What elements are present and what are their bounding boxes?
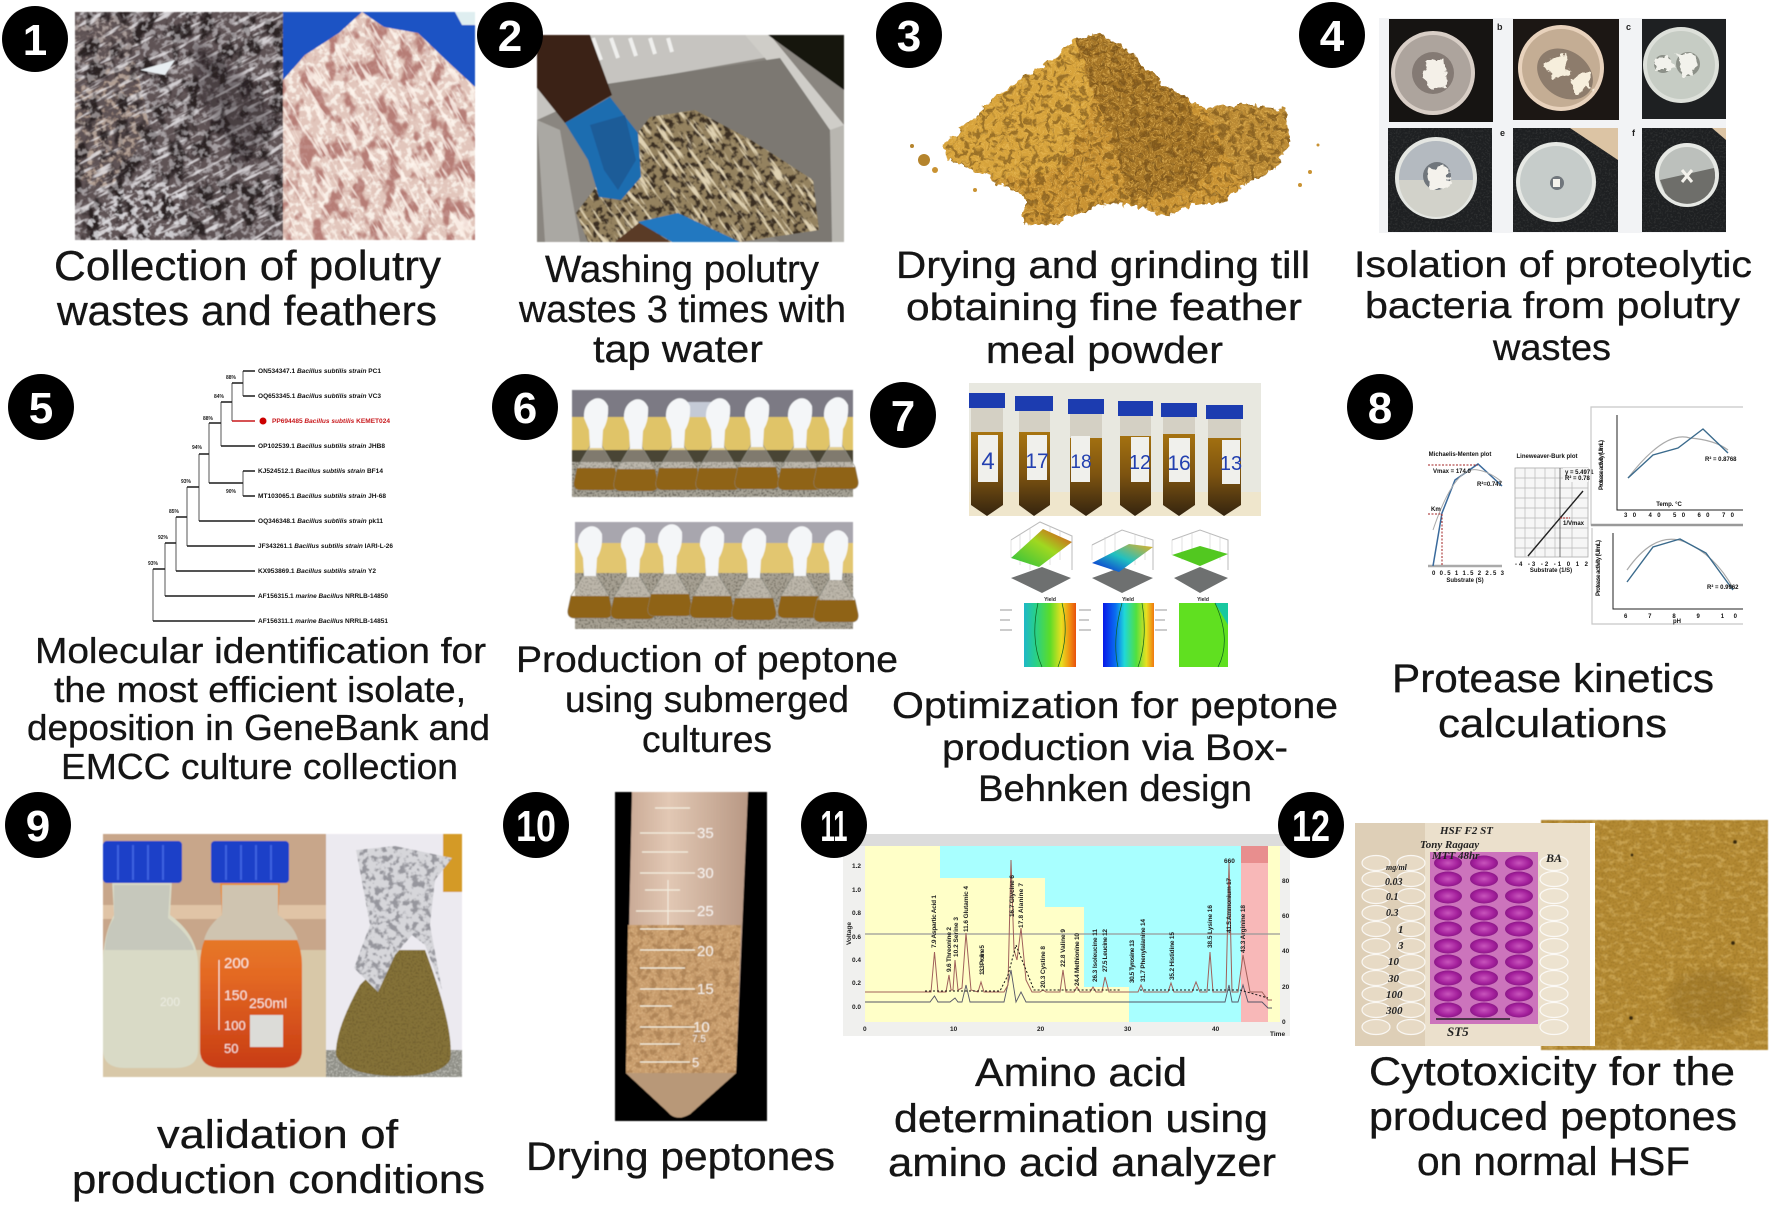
chromatogram: 0.2 [852,980,861,987]
chromatogram: Voltage [846,922,853,945]
caption 8: calculations [1438,702,1667,746]
phylogenetic tree: KJ524512.1 Bacillus subtilis strain BF14 [258,468,384,475]
chromatogram: 22.8 Valine 9 [1060,929,1067,967]
photo: 96-well MTT plate: BA [1545,851,1562,865]
chart: Lineweaver-Burk plot: R² = 0.78 [1565,475,1591,482]
badge 1 [2,6,68,72]
caption 9 [72,1113,485,1202]
badge 6: 6 [513,384,537,433]
caption 5 [27,630,490,787]
phylogenetic tree: 84% [214,394,225,400]
photo: conical tube with dried peptone: 10 [693,1019,710,1036]
phylogenetic tree: 85% [169,509,180,515]
photo: 96-well MTT plate [1355,823,1595,1046]
caption 3 [896,245,1310,372]
chart: Lineweaver-Burk plot [1515,454,1594,574]
chart: temperature activity: 30 40 50 60 70 [1624,513,1735,519]
caption 5: Molecular identification for [35,630,486,671]
panel: step 4 isolation [1299,2,1752,368]
photo: 96-well MTT plate: 0.03 [1385,877,1402,888]
chart: pH activity: 6 7 8 9 10 [1624,614,1738,620]
photo: agar plates with clear zones: c [1626,22,1631,32]
badge 11: 11 [820,802,848,851]
photo: conical tube with dried peptone: 7.5 [692,1034,706,1045]
badge 7 [870,382,936,448]
chromatogram: 40 [1212,1026,1220,1033]
photo: 96-well MTT plate: 3 [1397,940,1404,952]
badge 12 [1278,792,1344,858]
caption 1 [54,242,441,334]
chromatogram: 9.6 Threonine 2 [946,927,953,972]
chart: pH activity: Protease activity (U/mL) [1596,540,1602,596]
caption 4 [1354,244,1752,368]
photo: two bottles and foil-capped flask: 100 [224,1018,246,1033]
photo: six tubes: 17 [1025,450,1049,473]
photo: two bottles and foil-capped flask: 200 [224,955,249,972]
chromatogram [843,834,1290,1038]
photo: 96-well MTT plate: 30 [1387,973,1400,985]
photo: conical tube with dried peptone: 15 [697,981,714,998]
photo: two bottles and foil-capped flask: 50 [224,1041,238,1056]
chart: Lineweaver-Burk plot: Substrate (1/S) [1530,568,1572,574]
chart: Lineweaver-Burk plot: -4 -3 -2 -1 0 1 2 [1515,562,1589,568]
caption 12: on normal HSF [1417,1140,1690,1184]
chromatogram: 30 [1124,1026,1132,1033]
badge 6 [492,374,558,440]
badge 2 [477,2,543,68]
caption 6: using submerged [565,679,849,720]
badge 5: 5 [29,384,53,433]
panel: step 11 amino acid analysis [801,792,1290,1185]
photo: agar plates with clear zones: f [1632,128,1636,138]
photo: 96-well MTT plate: 0.1 [1386,892,1398,903]
caption 7: production via Box- [942,727,1288,768]
badge 4: 4 [1320,12,1345,61]
chromatogram: 11.6 Glutamic 4 [963,886,970,932]
phylogenetic tree: 90% [226,489,237,495]
badge 7: 7 [891,392,915,441]
chart: temperature activity: Temp. °C [1656,502,1682,508]
chromatogram: 0.4 [852,957,861,964]
chromatogram: 80 [1282,878,1290,885]
phylogenetic tree: 94% [192,445,203,451]
chromatogram: 43.3 Arginine 18 [1240,905,1247,953]
caption 2: Washing polutry [545,249,819,291]
photo: washing in a sink [536,34,845,243]
chromatogram: 10.2 Serine 3 [953,917,960,957]
caption 2: wastes 3 times with [518,289,846,331]
badge 8: 8 [1368,384,1392,433]
caption 3: obtaining fine feather [906,287,1302,329]
photo: agar plates with clear zones [1379,18,1726,233]
phylogenetic tree: JF343261.1 Bacillus subtilis strain IARI-L-26 [258,543,394,550]
caption 5: EMCC culture collection [61,746,458,787]
photo: flasks row two [568,522,858,629]
caption 4: wastes [1492,327,1611,368]
chart: pH activity: pH [1673,619,1681,625]
caption 11: amino acid analyzer [888,1141,1276,1185]
contour plots [1000,597,1228,667]
panel: step 1 collection [2,6,476,326]
caption 12: Cytotoxicity for the [1369,1050,1735,1094]
photo: 96-well MTT plate: HSF F2 ST [1439,825,1494,837]
caption 10: Drying peptones [526,1135,835,1179]
chromatogram: 20.3 Cystine 8 [1040,946,1047,988]
photo: agar plates with clear zones: e [1500,128,1505,138]
badge 2: 2 [498,12,522,61]
badge 5 [8,374,74,440]
phylogenetic tree: 88% [226,375,237,381]
chromatogram: 0 [863,1026,867,1033]
photo: 96-well MTT plate: 0.3 [1386,908,1398,919]
chart: temperature activity [1591,407,1743,525]
photo: flasks row one [572,390,858,497]
caption 11: Amino acid [975,1051,1187,1095]
phylogenetic tree [148,368,394,625]
photo: six tubes: 13 [1220,453,1242,475]
caption 5: deposition in GeneBank and [27,707,490,748]
panel: step 7 Box-Behnken optimization [870,382,1338,809]
photo: six tubes: 18 [1070,452,1092,473]
chromatogram: 20 [1037,1026,1045,1033]
badge 12: 12 [1292,802,1330,851]
chromatogram: 30.5 Tyrosine 13 [1129,940,1136,983]
chromatogram: 27.5 Leucine 12 [1102,929,1109,972]
caption 11 [888,1051,1276,1185]
caption 7: Optimization for peptone [892,685,1338,726]
chromatogram: 0.6 [852,934,861,941]
chromatogram: 13.3 Proline 5 [979,945,986,975]
chart: temperature activity: Protease activity (U/mL) [1599,440,1605,490]
chart: Michaelis-Menten plot: Vmax = 174.0 [1433,469,1472,475]
contour plots: Yield [1197,597,1209,603]
panel: step 10 drying peptones [503,792,835,1179]
chromatogram: 16.7 Glycine 6 [1009,875,1016,917]
caption 6: cultures [642,719,772,760]
photo: conical tube with dried peptone: 35 [697,825,714,842]
photo: two bottles and foil-capped flask: 200 [160,995,180,1009]
photo: 96-well MTT plate: ST5 [1447,1024,1469,1039]
caption 1: Collection of polutry [54,242,441,289]
photo: 96-well MTT plate: 100 [1386,989,1403,1001]
chromatogram: Time [1270,1031,1285,1038]
phylogenetic tree: MT103065.1 Bacillus subtilis strain JH-68 [258,493,387,500]
phylogenetic tree: PP694485 Bacillus subtilis KEMET024 [272,418,391,425]
photo: two bottles and foil-capped flask: 250ml [249,995,287,1011]
caption 9: production conditions [72,1158,485,1202]
chart: Lineweaver-Burk plot: y = 5.4971 [1565,470,1594,476]
caption 8: Protease kinetics [1392,657,1714,701]
photo: conical tube with dried peptone: 20 [697,943,714,960]
caption 4: bacteria from polutry [1365,285,1741,326]
photo: 96-well MTT plate: MTT 48hr [1431,850,1480,862]
caption 2: tap water [593,329,763,371]
photo: conical tube with dried peptone: 5 [692,1055,699,1070]
chromatogram: 38.5 Lysine 16 [1207,905,1214,948]
caption 5: the most efficient isolate, [54,669,466,710]
badge 10 [503,792,569,858]
photo: 96-well MTT plate: 1 [1398,924,1404,936]
panel: step 5 molecular identification [8,368,490,787]
caption 12: produced peptones [1369,1095,1737,1139]
photo: six tubes: 4 [981,448,995,475]
phylogenetic tree: AF156311.1 marine Bacillus NRRLB-14851 [258,618,388,625]
chart: Michaelis-Menten plot: R²=0.747 [1477,481,1503,488]
phylogenetic tree: AF156315.1 marine Bacillus NRRLB-14850 [258,593,388,600]
chart: Michaelis-Menten plot [1428,452,1505,584]
chromatogram: 1.2 [852,863,861,870]
chart: temperature activity: R² = 0.8768 [1705,456,1737,463]
chromatogram: 0.8 [852,910,861,917]
caption 12 [1369,1050,1737,1184]
response surface plots [1011,522,1228,593]
chromatogram: 24.4 Methionine 10 [1074,933,1081,986]
panel: step 9 validation [5,792,485,1202]
caption 3: meal powder [986,330,1223,372]
chromatogram: 1.0 [852,887,861,894]
chromatogram: 31.7 Phenylalanine 14 [1140,919,1147,982]
phylogenetic tree: OP102539.1 Bacillus subtilis strain JHB8 [258,443,386,450]
photo: two bottles and foil-capped flask: 150 [224,987,248,1003]
chromatogram: 60 [1282,913,1290,920]
photo: six tubes: 12 [1129,452,1151,474]
photo: conical tube with dried peptone [615,792,767,1121]
chromatogram: 660 [1224,858,1235,865]
phylogenetic tree: 92% [158,535,169,541]
caption 4: Isolation of proteolytic [1354,244,1752,285]
panel: step 8 protease kinetics [1347,374,1743,746]
chart: Lineweaver-Burk plot: 1/Vmax [1563,521,1585,527]
panel: step 3 drying and grinding [876,2,1320,372]
photo: six tubes: 16 [1167,452,1191,475]
badge 3 [876,2,942,68]
chromatogram: 35.2 Histidine 15 [1169,932,1176,980]
chromatogram: 17.8 Alanine 7 [1018,883,1025,928]
panel: step 6 production in submerged cultures [492,374,898,760]
photo: feathers and poultry waste [74,11,476,241]
chromatogram: 0 [1282,1019,1286,1026]
badge 10: 10 [516,802,556,851]
caption 8 [1392,657,1714,746]
caption 7: Behnken design [978,768,1252,809]
chart: Lineweaver-Burk plot: Lineweaver-Burk plot [1516,454,1578,460]
caption 7 [892,685,1338,809]
photo: six tubes [969,383,1261,516]
photo: 96-well MTT plate: 300 [1385,1005,1403,1017]
badge 9 [5,792,71,858]
badge 3: 3 [897,12,921,61]
chromatogram: 41.5 Ammonium 17 [1226,878,1233,933]
caption 6: Production of peptone [516,639,898,680]
photo: 96-well MTT plate: Tony Ragaay [1420,839,1479,851]
phylogenetic tree: OQ653345.1 Bacillus subtilis strain VC3 [258,393,382,400]
photo: conical tube with dried peptone: 30 [697,865,714,882]
phylogenetic tree: ON534347.1 Bacillus subtilis strain PC1 [258,368,382,375]
caption 2 [518,249,846,371]
caption 11: determination using [894,1097,1268,1141]
photo: two bottles and foil-capped flask [103,834,462,1077]
chart: Michaelis-Menten plot: Km [1431,507,1441,513]
badge 4 [1299,2,1365,68]
chart: pH activity: R² = 0.9962 [1707,584,1739,591]
chromatogram: 40 [1282,948,1290,955]
caption 9: validation of [157,1113,399,1157]
chromatogram: 20 [1282,984,1290,991]
micrograph: HSF cells [1541,820,1768,1050]
photo: 96-well MTT plate: mg/ml [1386,863,1408,872]
chromatogram: 7.9 Aspartic Acid 1 [931,895,938,948]
badge 9: 9 [26,802,50,851]
panel: step 2 washing [477,2,845,370]
caption 3: Drying and grinding till [896,245,1310,287]
contour plots: Yield [1122,597,1134,603]
phylogenetic tree: 93% [181,479,192,485]
phylogenetic tree: 88% [203,416,214,422]
panel: step 12 cytotoxicity [1278,792,1768,1184]
chart: Michaelis-Menten plot: 0 0.5 1 1.5 2 2.5 3 [1432,571,1505,577]
photo: conical tube with dried peptone: 25 [697,903,714,920]
phylogenetic tree: OQ346348.1 Bacillus subtilis strain pk11 [258,518,384,525]
chromatogram: 26.3 Isoleucine 11 [1092,929,1099,982]
photo: agar plates with clear zones: b [1497,22,1503,32]
phylogenetic tree: KX953869.1 Bacillus subtilis strain Y2 [258,568,377,575]
chart: Michaelis-Menten plot: Substrate (S) [1446,578,1484,584]
chromatogram: 0.0 [852,1004,861,1011]
photo: 96-well MTT plate: 10 [1388,956,1400,968]
caption 6 [516,639,898,760]
badge 8 [1347,374,1413,440]
photo: feather meal powder pile [910,32,1320,226]
badge 11 [801,792,867,858]
chart: Michaelis-Menten plot: Michaelis-Menten plot [1429,452,1491,458]
chart: pH activity [1592,528,1743,625]
contour plots: Yield [1044,597,1056,603]
badge 1: 1 [23,16,47,65]
phylogenetic tree: 93% [148,561,159,567]
chromatogram: 10 [950,1026,958,1033]
caption 1: wastes and feathers [56,287,437,334]
